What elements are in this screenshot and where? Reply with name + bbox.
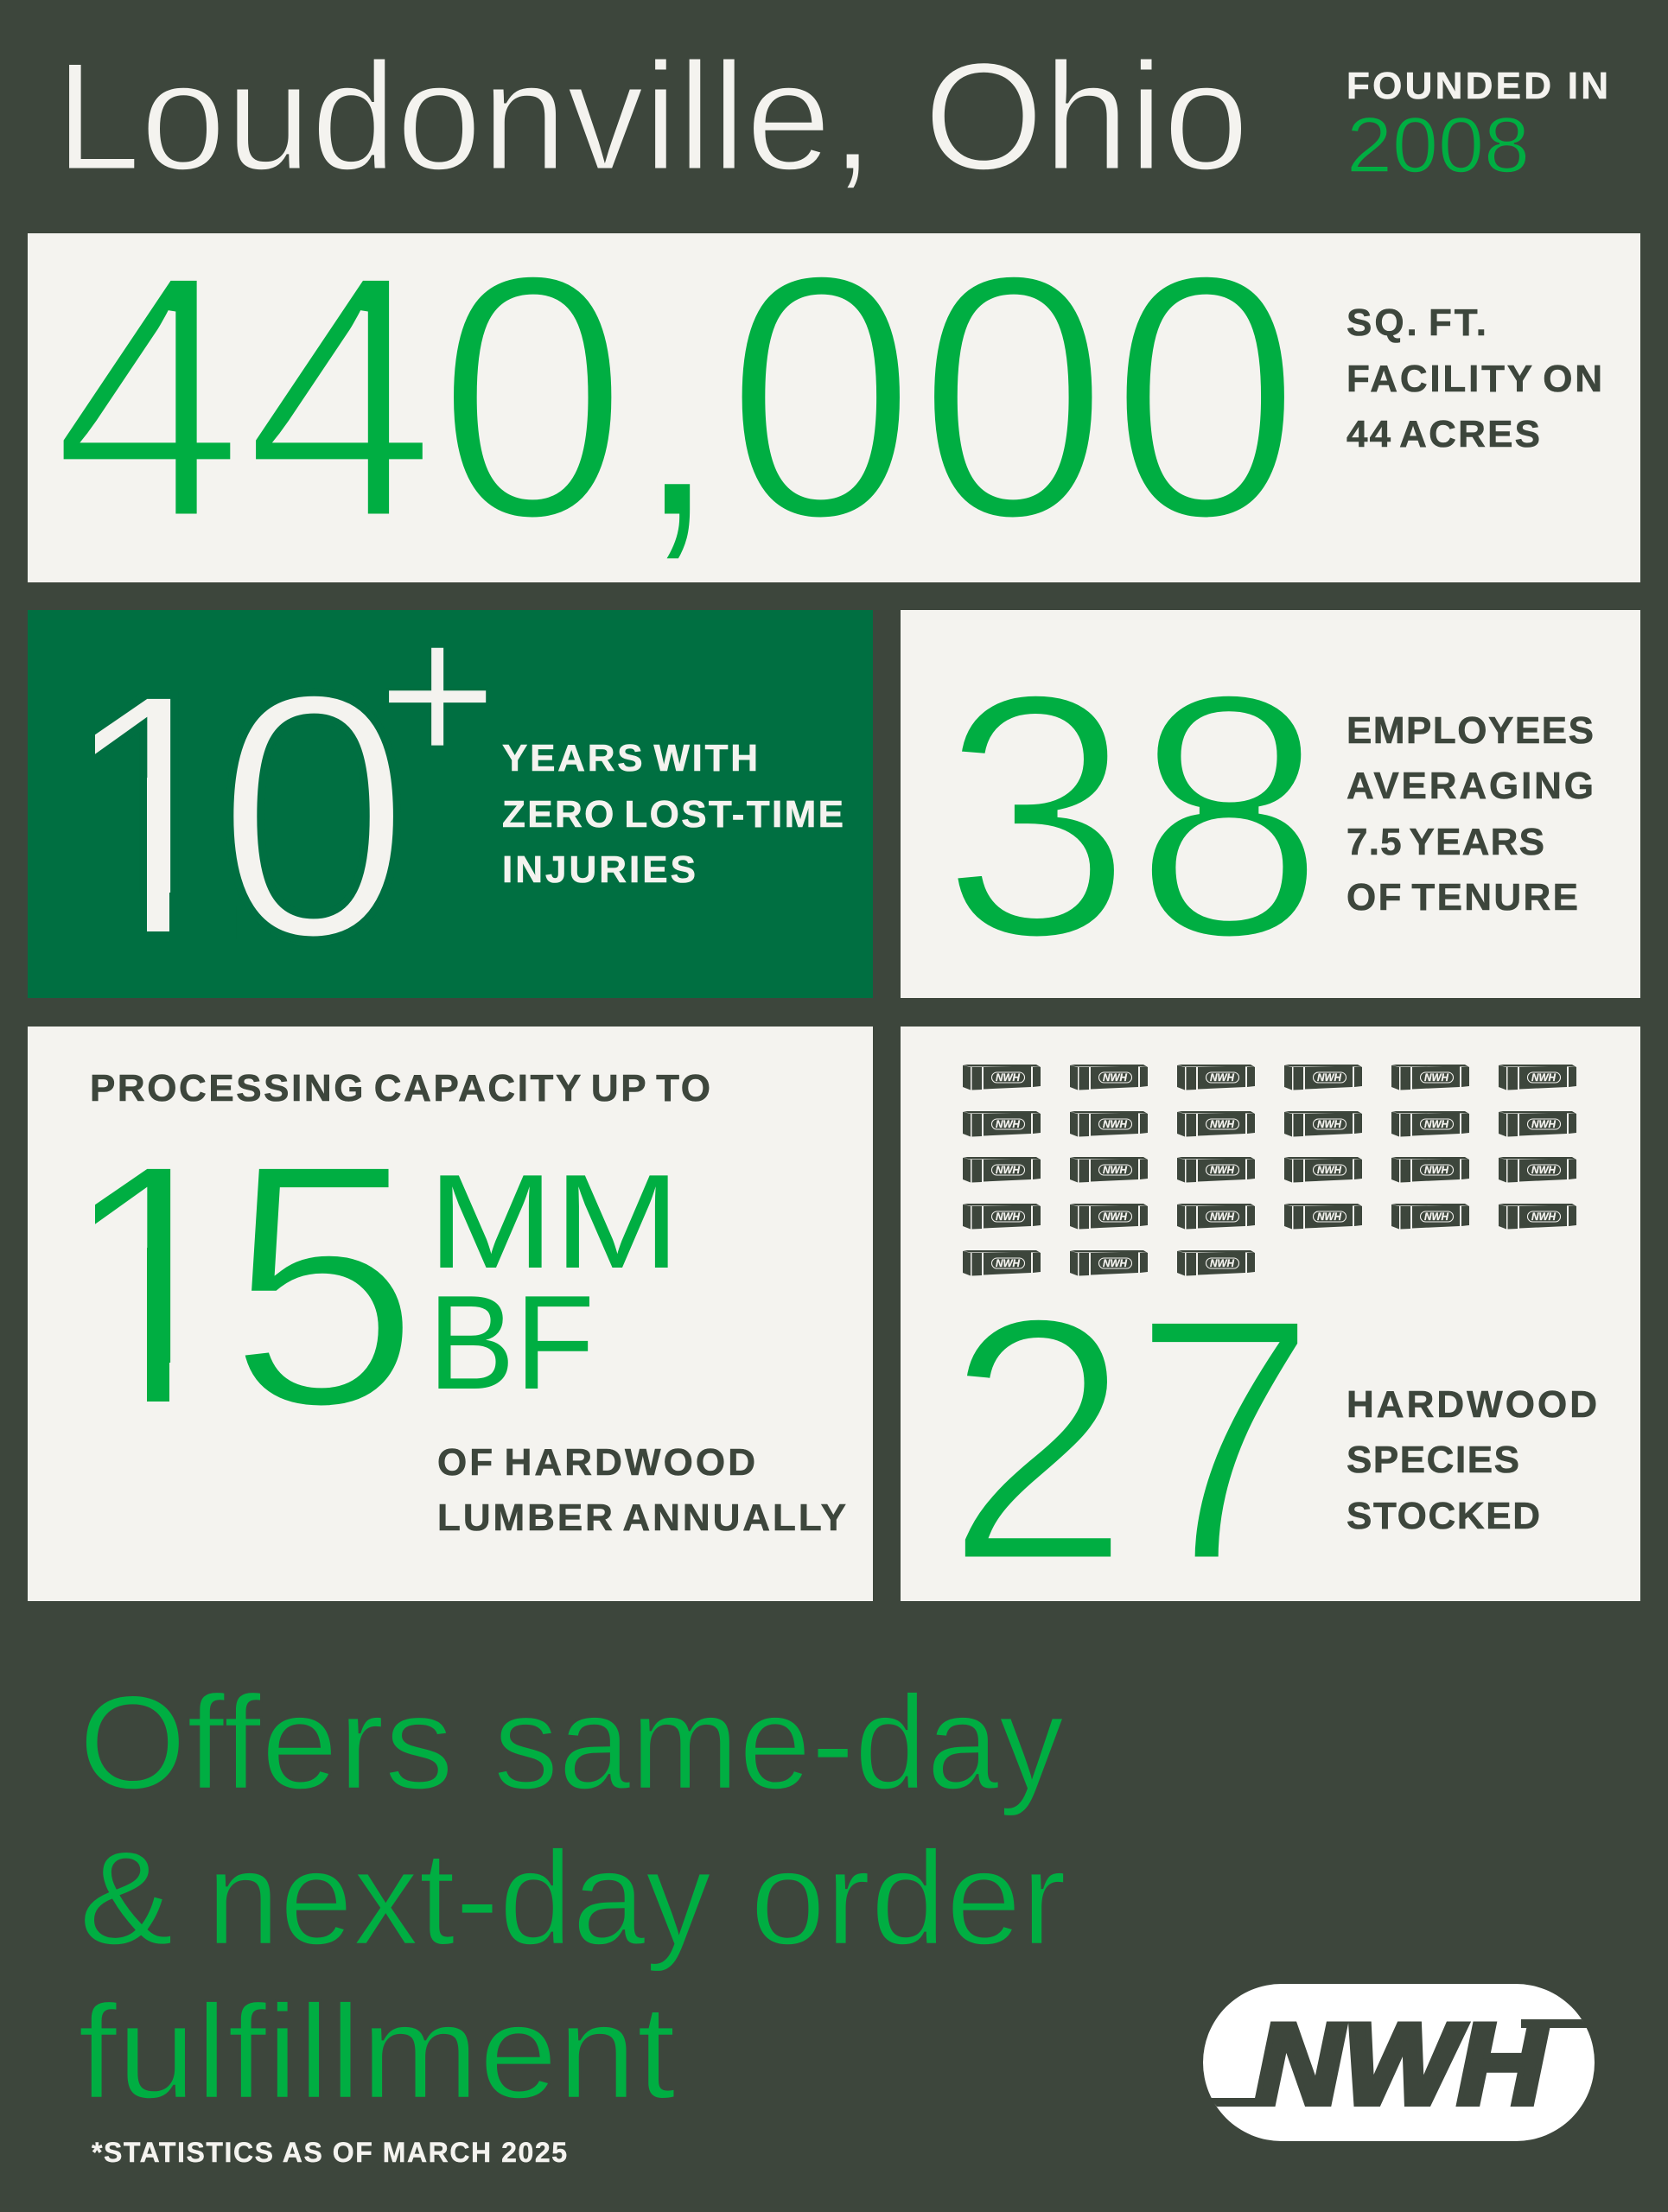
icon: lumber bundle xyxy=(1391,1204,1469,1229)
icon: lumber bundle: NWH xyxy=(1531,1212,1557,1223)
icon: lumber bundle xyxy=(1391,1111,1469,1137)
icon: lumber bundle xyxy=(963,1157,1041,1182)
facility label: SQ. FT. xyxy=(1346,302,1487,344)
panel: safety record xyxy=(28,580,873,1011)
facility label: FACILITY ON xyxy=(1346,358,1602,400)
icon: lumber bundle: NWH xyxy=(1103,1212,1128,1223)
big number: 10+: + xyxy=(378,580,497,809)
icon: lumber bundle xyxy=(1177,1204,1255,1229)
unit: MM BF xyxy=(428,1147,680,1417)
icon: lumber bundle: NWH xyxy=(1210,1073,1235,1084)
icon: lumber bundle: NWH xyxy=(1531,1073,1557,1084)
employees label: OF TENURE xyxy=(1346,876,1578,918)
facility label xyxy=(1346,302,1602,455)
safety label: YEARS WITH xyxy=(502,737,758,779)
icon: lumber bundle xyxy=(1284,1157,1362,1182)
icon: lumber bundle: NWH xyxy=(1103,1166,1128,1176)
big number: 15: 5 xyxy=(226,1089,421,1480)
founded in block: 2008 xyxy=(1346,102,1530,189)
big number: 10+: 1 xyxy=(55,619,250,1010)
tagline: & xyxy=(79,1823,174,1973)
icon: lumber bundle: NWH xyxy=(996,1259,1021,1269)
species label xyxy=(1346,1383,1597,1537)
employees label: 7.5 YEARS xyxy=(1346,821,1544,863)
panel: facility size xyxy=(28,200,1640,592)
panel: species stocked xyxy=(901,1027,1640,1635)
icon: lumber bundle xyxy=(1499,1111,1576,1137)
icon: lumber bundle: NWH xyxy=(1531,1166,1557,1176)
tagline: Offers xyxy=(79,1668,454,1817)
panel: employees xyxy=(901,610,1640,1011)
icon: lumber bundle: NWH xyxy=(1210,1212,1235,1223)
icon: lumber bundle xyxy=(1070,1250,1148,1275)
logo: NWH xyxy=(1203,1984,1595,2141)
big number: 38: 38 xyxy=(940,620,1326,1011)
icon grid: 27 lumber bundles xyxy=(963,1065,1576,1275)
icon: lumber bundle: NWH xyxy=(996,1120,1021,1130)
icon: lumber bundle: NWH xyxy=(1424,1212,1449,1223)
title: Loudonville, xyxy=(55,30,874,202)
icon: lumber bundle: NWH xyxy=(1103,1073,1128,1084)
icon: lumber bundle xyxy=(1284,1065,1362,1090)
employees label: AVERAGING xyxy=(1346,765,1594,807)
unit: MM BF: MM xyxy=(428,1147,680,1296)
icon: lumber bundle: NWH xyxy=(1210,1166,1235,1176)
icon: lumber bundle: NWH xyxy=(1531,1120,1557,1130)
big number: 10+: 0 xyxy=(216,620,411,1011)
icon: lumber bundle xyxy=(1070,1204,1148,1229)
icon: lumber bundle: NWH xyxy=(1210,1120,1235,1130)
unit: MM BF: BF xyxy=(428,1268,595,1417)
title xyxy=(55,30,1249,202)
safety label: INJURIES xyxy=(502,849,696,891)
icon: lumber bundle: NWH xyxy=(1317,1212,1342,1223)
big number: 10+ xyxy=(55,580,497,1011)
icon: lumber bundle: NWH xyxy=(1424,1166,1449,1176)
icon: lumber bundle xyxy=(1391,1065,1469,1090)
capacity label: LUMBER ANNUALLY xyxy=(437,1497,846,1539)
icon: lumber bundle xyxy=(1499,1204,1576,1229)
icon: lumber bundle xyxy=(1284,1204,1362,1229)
icon: lumber bundle xyxy=(1070,1065,1148,1090)
icon: lumber bundle xyxy=(963,1250,1041,1275)
icon: lumber bundle: NWH xyxy=(996,1212,1021,1223)
icon: lumber bundle xyxy=(963,1111,1041,1137)
icon: lumber bundle xyxy=(963,1065,1041,1090)
capacity heading: PROCESSING CAPACITY UP TO xyxy=(90,1067,710,1109)
tagline: order xyxy=(750,1823,1066,1973)
icon: lumber bundle: NWH xyxy=(1424,1073,1449,1084)
icon: lumber bundle: NWH xyxy=(996,1166,1021,1176)
facility label: 44 ACRES xyxy=(1346,413,1540,455)
icon: lumber bundle xyxy=(1499,1157,1576,1182)
big number: 440,000: 440,000 xyxy=(52,200,1302,592)
title: Ohio xyxy=(924,30,1249,202)
icon: lumber bundle: NWH xyxy=(1424,1120,1449,1130)
icon: lumber bundle: NWH xyxy=(1210,1259,1235,1269)
icon: lumber bundle: NWH xyxy=(996,1073,1021,1084)
big number: 15 xyxy=(55,1089,421,1480)
founded in block xyxy=(1346,65,1608,189)
icon: lumber bundle: NWH xyxy=(1103,1120,1128,1130)
tagline: fulfillment xyxy=(78,1977,676,2126)
safety label xyxy=(502,737,844,891)
icon: lumber bundle xyxy=(1499,1065,1576,1090)
icon: lumber bundle xyxy=(1070,1111,1148,1137)
employees label: EMPLOYEES xyxy=(1346,709,1594,752)
icon: lumber bundle xyxy=(1177,1111,1255,1137)
founded in block: FOUNDED IN xyxy=(1346,65,1608,107)
capacity label xyxy=(437,1441,846,1539)
panel: processing capacity xyxy=(28,1027,873,1601)
species label: SPECIES xyxy=(1346,1439,1519,1481)
species label: STOCKED xyxy=(1346,1495,1540,1537)
icon: lumber bundle: NWH xyxy=(1317,1166,1342,1176)
icon: lumber bundle xyxy=(1284,1111,1362,1137)
icon: lumber bundle xyxy=(1070,1157,1148,1182)
icon: lumber bundle xyxy=(963,1204,1041,1229)
icon: lumber bundle: NWH xyxy=(1103,1259,1128,1269)
footnote: *STATISTICS AS OF MARCH 2025 xyxy=(92,2137,567,2168)
safety label: ZERO LOST-TIME xyxy=(502,793,844,836)
big number: 15: 1 xyxy=(55,1089,250,1480)
employees label xyxy=(1346,709,1594,918)
icon: lumber bundle: NWH xyxy=(1317,1073,1342,1084)
capacity label: OF HARDWOOD xyxy=(437,1441,755,1484)
icon: lumber bundle xyxy=(1177,1157,1255,1182)
big number: 27: 27 xyxy=(945,1243,1318,1635)
icon: lumber bundle xyxy=(1177,1250,1255,1275)
species label: HARDWOOD xyxy=(1346,1383,1597,1426)
tagline xyxy=(78,1668,1066,2126)
icon: lumber bundle xyxy=(1391,1157,1469,1182)
icon: lumber bundle: NWH xyxy=(1317,1120,1342,1130)
tagline: same-day xyxy=(493,1668,1064,1817)
logo: NWH: NWH xyxy=(1255,2001,1548,2129)
tagline: next-day xyxy=(207,1823,711,1973)
icon: lumber bundle xyxy=(1177,1065,1255,1090)
